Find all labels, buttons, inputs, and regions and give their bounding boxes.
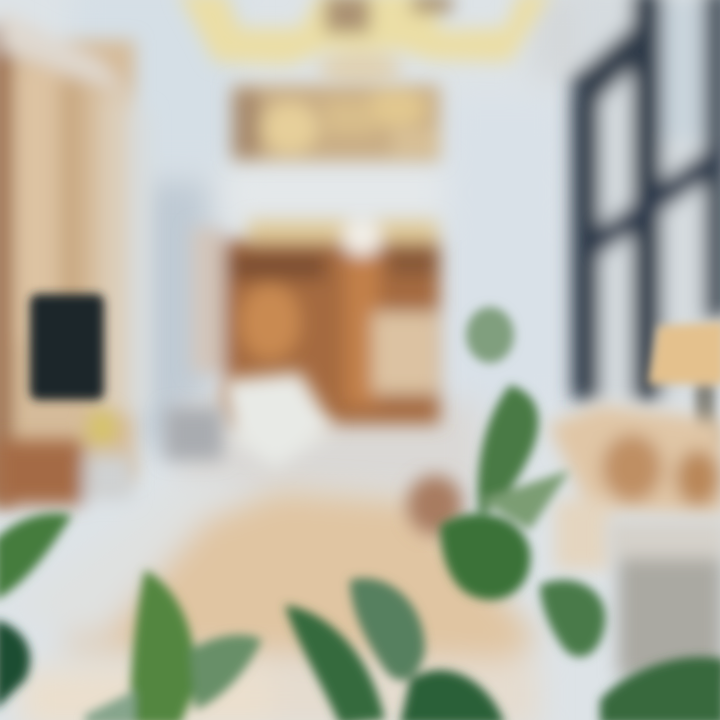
gold ceiling lights [178, 0, 552, 84]
dark window frames [570, 0, 720, 400]
walls and ceiling [70, 0, 600, 490]
tan sofa [548, 405, 720, 570]
wood cabinet lower left [0, 409, 133, 505]
plant: tall centre right [440, 307, 720, 720]
lamp shade and stand [648, 322, 720, 445]
black screen [30, 294, 104, 400]
floor [15, 480, 540, 720]
left wood panel wall [0, 10, 150, 505]
gold hanging fixture [232, 85, 440, 161]
grey side table [608, 520, 720, 678]
wooden shelving centre [192, 220, 440, 424]
plant: bottom left leaves [85, 570, 262, 720]
plant: bottom centre leaves [285, 578, 505, 720]
brown pot behind plant [407, 475, 463, 535]
plant: far left leaves [0, 513, 72, 710]
white armchair [165, 372, 335, 468]
